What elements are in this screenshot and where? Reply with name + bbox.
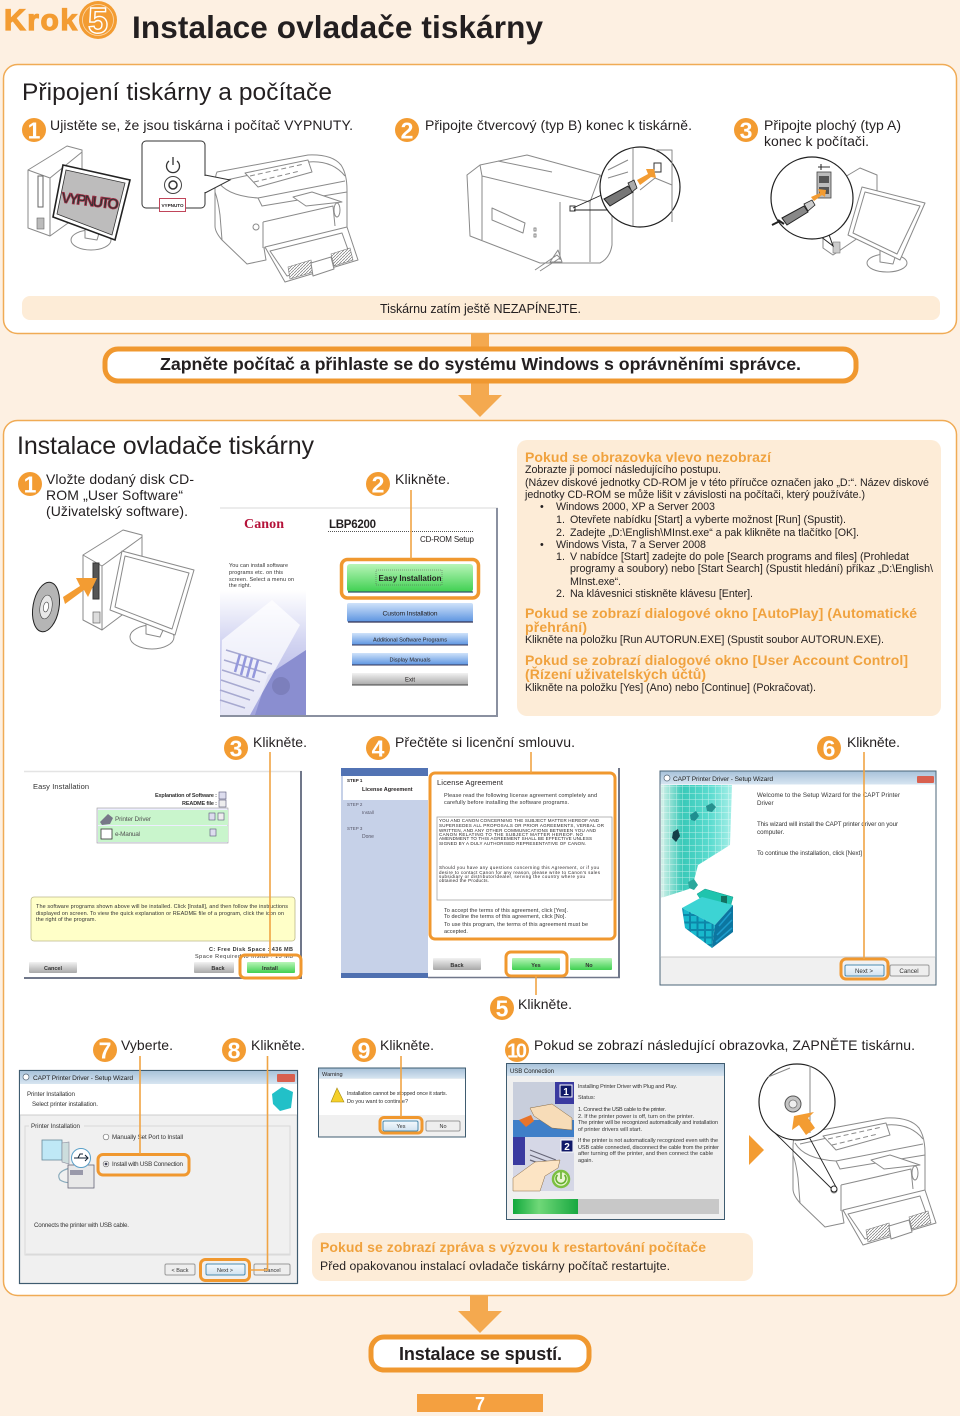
header: Krok 5 [4, 0, 117, 41]
procedure text [524, 464, 933, 600]
step 6 label: Klikněte. [847, 734, 900, 750]
screenshot: Setup Wizard welcome: Welcome to the Setup Wizard for the CAPT Printer [757, 792, 900, 799]
screenshot: USB connection: again. [578, 1158, 593, 1164]
panel: driver installation [4, 420, 956, 1296]
screenshot: License Agreement: STEP 3 [347, 826, 363, 831]
screenshot: Easy Installation: C: Free Disk Space : 436 MB [209, 947, 293, 953]
screenshot: Easy Installation: Space Required to Install : 15 MB [195, 954, 293, 960]
screenshot: warning dialog: Warning [322, 1072, 343, 1078]
screenshot: Setup Wizard welcome: This wizard will install the CAPT printer driver on your [757, 821, 898, 828]
image: connect USB cable [513, 1082, 574, 1137]
computer switched off: VYPNUTO [60, 190, 120, 214]
procedure text: • [540, 501, 544, 513]
procedure text: 2. [556, 588, 565, 600]
screenshot: printer installation wizard [20, 1070, 298, 1284]
screenshot: License Agreement: STEP 1 [347, 778, 363, 783]
screenshot: License Agreement: desire to contact Canon for any reason, please write to Canon's sales [439, 870, 601, 875]
procedure text: 1. [556, 551, 565, 563]
procedure text: Zobrazte ji pomocí následujícího postupu. [525, 464, 721, 476]
screenshot: printer installation wizard: Next > [217, 1268, 233, 1274]
screenshot: warning dialog: No [439, 1124, 447, 1130]
screenshot: License Agreement: obtained the Products. [439, 878, 489, 883]
screenshot: License Agreement: YOU AND CANON CONCERNING THE SUBJECT MATTER HEREOF AND [439, 818, 600, 823]
heading: User Account Control [525, 652, 908, 682]
button: Additional Software Programs: Additional Software Programs [373, 638, 447, 644]
screenshot: USB connection: Installing Printer Driver with Plug and Play. [578, 1084, 677, 1090]
note: restart prompt: Pokud se zobrazí zpráva s výzvou k restartování počítače [320, 1239, 706, 1255]
screenshot: License Agreement: SUPERSEDES ALL PROPOSALS OR PRIOR AGREEMENTS, VERBAL OR [439, 823, 605, 828]
step 7 label [93, 1037, 173, 1064]
panel heading: Instalace ovladače tiskárny [17, 432, 314, 460]
step 2 label [395, 117, 692, 144]
procedure text: programy a soubory) nebo [Start Search] (Spustit hledání) příkaz „D:\English\ [570, 563, 933, 575]
step 1 label: Ujistěte se, že jsou tiskárna i počítač VYPNUTY. [50, 117, 353, 133]
procedure text: 1. [556, 514, 565, 526]
screenshot: License Agreement: License Agreement [362, 787, 413, 793]
heading: User Account Control: (Řízení uživatelských účtů) [525, 665, 706, 682]
screenshot: USB connection: 1. Connect the USB cable to the printer. [578, 1107, 666, 1113]
screenshot: License Agreement: STEP 2 [347, 802, 363, 807]
screenshot: printer installation wizard: Manually Set Port to Install [112, 1134, 183, 1141]
step 3 label: konec k počítači. [764, 133, 869, 149]
screenshot: CD-ROM setup: LBP6200 [329, 519, 376, 531]
button: Display Manuals: Display Manuals [390, 658, 431, 664]
screenshot: CD-ROM setup: You can install software [229, 563, 288, 569]
screenshot: Setup Wizard welcome: Driver [757, 800, 774, 807]
step 9 label [352, 1037, 434, 1064]
step 3 label: Klikněte. [253, 734, 307, 750]
icon: computer with USB [42, 1140, 94, 1188]
screenshot: CD-ROM setup: screen. Select a menu on [229, 577, 294, 583]
screenshot: Setup Wizard welcome [660, 771, 936, 985]
screenshot: Setup Wizard welcome: CAPT Printer Driver - Setup Wizard [673, 776, 773, 783]
step 9 label: Klikněte. [380, 1037, 434, 1053]
heading: screen not shown: Pokud se obrazovka vlevo nezobrazí [525, 449, 772, 465]
step 3 label [224, 734, 307, 762]
panel heading: Připojení tiskárny a počítače [22, 79, 332, 106]
screenshot: USB connection: The printer will be recognized automatically and installation [578, 1120, 718, 1126]
step 6 label: 6 [823, 736, 835, 762]
screenshot: printer installation wizard: < Back [172, 1268, 189, 1274]
procedure text: • [540, 539, 544, 551]
screenshot: License Agreement: Install [362, 810, 374, 815]
screenshot: printer installation wizard: Connects the printer with USB cable. [34, 1222, 129, 1229]
screenshot: Setup Wizard welcome: computer. [757, 829, 784, 836]
procedure text: MInst.exe“. [570, 576, 621, 588]
screenshot: License Agreement: To accept the terms of this agreement, click [Yes]. [444, 908, 568, 914]
image: cyan blocks [661, 785, 733, 948]
procedure text: Zadejte „D:\English\MInst.exe“ a pak klikněte na tlačítko [OK]. [570, 527, 859, 539]
computer and CD [29, 530, 194, 649]
step 4 label: 4 [372, 736, 385, 762]
screenshot: License Agreement: carefully before installing the software programs. [444, 800, 569, 806]
step 1 label: 1 [28, 118, 41, 144]
button: Easy Installation (highlighted): Easy Installation [378, 574, 442, 583]
screenshot: License Agreement: subsidiary or distributor/dealer, serving the country where you [439, 874, 585, 879]
screenshot: Setup Wizard welcome: Next > [855, 968, 873, 975]
callout: power button off [142, 141, 230, 212]
note bar: do not switch on: Tiskárnu zatím ještě NEZAPÍNEJTE. [380, 301, 581, 316]
step 10 label [505, 1037, 915, 1062]
screenshot: Easy Installation: displayed on screen. To view the quick explanation or README file of a program, click the icon on [36, 911, 284, 917]
screenshot: License Agreement: Should you have any questions concerning this Agreement, or if you [439, 865, 599, 870]
image: power on: 2 [564, 1142, 570, 1153]
image: power on [513, 1137, 574, 1191]
computer switched off [28, 146, 130, 250]
screenshot: License Agreement: Done [362, 834, 374, 840]
button: Custom Installation: Custom Installation [382, 610, 438, 618]
screenshot: Setup Wizard welcome: To continue the installation, click [Next] [757, 850, 862, 857]
step 4 label: Přečtěte si licenční smlouvu. [395, 734, 575, 750]
screenshot: License Agreement: SIGNED BY A DULY AUTHORISED REPRESENTATIVE OF CANON. [439, 841, 586, 846]
procedure text: 2. [556, 527, 565, 539]
step 6 label [817, 734, 900, 762]
heading: User Account Control: Pokud se zobrazí dialogové okno [User Account Control] [525, 652, 908, 668]
step 1 label: 1 [24, 472, 37, 498]
step 3 label: Připojte plochý (typ A) [764, 117, 901, 133]
callout: log in as administrator [105, 349, 856, 381]
screenshot: warning dialog [318, 1068, 466, 1137]
button: Exit [352, 673, 468, 685]
step 1 label: Vložte dodaný disk CD- [46, 471, 194, 487]
screenshot: Easy Installation: The software programs shown above will be installed. Click [Install], and then follow the instructions [36, 904, 288, 910]
text: AutoPlay: Klikněte na položku [Run AUTORUN.EXE] (Spustit soubor AUTORUN.EXE). [525, 634, 884, 646]
screenshot: warning dialog: Installation cannot be stopped once it starts. [347, 1091, 447, 1097]
screenshot: Easy Installation: the right of the program. [36, 917, 96, 923]
button: Custom Installation [347, 603, 473, 622]
step 7 label: Vyberte. [121, 1037, 173, 1053]
screenshot: USB connection: of printer drivers will start. [578, 1127, 642, 1133]
screenshot: CD-ROM setup: the right. [229, 583, 251, 589]
procedure text: Windows Vista, 7 a Server 2008 [556, 539, 706, 551]
screenshot: Easy Installation: Easy Installation [33, 782, 89, 791]
step 3 label: 3 [740, 118, 752, 144]
page number: 7 [475, 1394, 485, 1414]
screenshot: CD-ROM setup: CD-ROM Setup [420, 535, 475, 544]
button: Exit: Exit [405, 678, 415, 684]
screenshot: USB connection: USB Connection [510, 1069, 554, 1075]
step 5 label [490, 996, 572, 1022]
screenshot: Easy Installation: e-Manual [115, 831, 141, 838]
step 10 label: Pokud se zobrazí následující obrazovka, ZAPNĚTE tiskárnu. [534, 1037, 915, 1053]
note: restart prompt [312, 1233, 753, 1281]
screenshot: USB connection: If the printer is not automatically recognized even with the [578, 1138, 718, 1144]
step 4 label [366, 734, 575, 762]
screenshot: printer installation wizard: CAPT Printer Driver - Setup Wizard [33, 1075, 133, 1082]
computer with USB port detail [771, 157, 925, 272]
screenshot: printer installation wizard: Printer Installation [27, 1091, 76, 1098]
step 10 label: 10 [507, 1040, 527, 1062]
step 2 label: 2 [372, 472, 384, 498]
screenshot: warning dialog: Do you want to continue? [347, 1099, 408, 1105]
printer rear view with USB port detail [467, 147, 680, 271]
screenshot: License Agreement: No [585, 963, 593, 969]
screenshot: License Agreement: License Agreement [437, 778, 504, 787]
step 3 label: 3 [230, 736, 242, 762]
callout: log in as administrator: Zapněte počítač a přihlaste se do systému Windows s oprávněními správce. [160, 354, 801, 374]
step 1 label [22, 117, 353, 144]
screenshot: License Agreement: To decline the terms of this agreement, click [No]. [444, 914, 566, 920]
screenshot: Setup Wizard welcome: Cancel [899, 968, 919, 975]
screenshot: USB connection: USB cable connected, disconnect the cable from the printer [578, 1145, 719, 1151]
screenshot: License Agreement: CANON RELATING TO THE SUBJECT MATTER HEREOF. NO [439, 832, 583, 837]
screenshot: Easy Installation: Back [211, 966, 226, 972]
screenshot: License Agreement: Please read the following license agreement completely and [444, 793, 597, 799]
step 9 label: 9 [358, 1038, 370, 1064]
screenshot: USB connection [506, 1064, 724, 1220]
note: restart prompt: Před opakovanou instalací ovladače tiskárny počítač restartujte. [320, 1259, 670, 1273]
panel: connect printer and computer [4, 64, 956, 334]
screenshot: printer installation wizard: Printer Installation [31, 1123, 81, 1130]
step 2 label: Připojte čtvercový (typ B) konec k tiskárně. [425, 117, 692, 133]
procedure text: V nabídce [Start] zadejte do pole [Search programs and files] (Prohledat [570, 551, 909, 563]
button: Display Manuals [352, 653, 468, 665]
step 1 label: ROM „User Software“ [46, 487, 183, 503]
screenshot: Easy Installation: Cancel [44, 966, 62, 972]
heading: AutoPlay [525, 605, 917, 635]
screenshot: printer installation wizard: Cancel [263, 1268, 281, 1274]
step 7 label: 7 [99, 1038, 111, 1064]
title: Instalace ovladače tiskárny [132, 9, 543, 45]
screenshot: CD-ROM setup: programs etc. on this [229, 570, 283, 576]
arrow: to installation start [458, 1296, 502, 1333]
header: Krok 5: Krok [4, 4, 77, 37]
callout: power button off: VYPNUTO [161, 203, 184, 208]
screenshot: License Agreement: Back [450, 963, 465, 969]
header: Krok 5: 5 [88, 0, 108, 41]
step 5 label: 5 [496, 996, 509, 1022]
page number [417, 1394, 543, 1414]
step 1 label [18, 471, 194, 519]
screenshot: Easy Installation: Explanation of Software : [155, 793, 217, 799]
screenshot: CD-ROM setup [220, 508, 498, 716]
info box: troubleshooting [517, 440, 941, 716]
screenshot: License Agreement: accepted. [444, 929, 468, 935]
printer with power button detail [759, 1064, 936, 1245]
heading: AutoPlay: přehrání) [525, 619, 587, 635]
step 1 label: (Uživatelský software). [46, 503, 188, 519]
arrow: to driver installation [458, 334, 502, 417]
step 8 label: Klikněte. [251, 1037, 305, 1053]
text: User Account Control: Klikněte na položku [Yes] (Ano) nebo [Continue] (Pokračovat). [525, 682, 816, 694]
screenshot: Easy Installation: Install [262, 966, 278, 972]
screenshot: printer installation wizard: Install with USB Connection [112, 1161, 184, 1168]
step 2 label: Klikněte. [395, 471, 450, 487]
arrow: next [749, 1135, 764, 1165]
screenshot: CD-ROM setup: Canon [244, 517, 284, 532]
screenshot: USB connection: 2. If the printer power is off, turn on the printer. [578, 1114, 694, 1120]
screenshot: License Agreement: AMENDMENT TO THIS AGREEMENT SHALL BE EFFECTIVE UNLESS [439, 836, 592, 841]
screenshot: License Agreement: WRITTEN, AND ANY OTHER COMMUNICATIONS BETWEEN YOU AND [439, 828, 597, 833]
button: Additional Software Programs [352, 633, 468, 645]
screenshot: License Agreement [341, 768, 620, 978]
step 2 label: 2 [401, 118, 413, 144]
note bar: do not switch on [22, 296, 940, 320]
screenshot: USB connection: Status: [578, 1095, 596, 1101]
step 3 label [734, 117, 901, 149]
heading: AutoPlay: Pokud se zobrazí dialogové okno [AutoPlay] (Automatické [525, 605, 917, 621]
procedure text: Windows 2000, XP a Server 2003 [556, 501, 715, 513]
step 8 label: 8 [228, 1038, 241, 1064]
procedure text: jednotky CD-ROM se může lišit v závislosti na počítači, který používáte.) [524, 489, 865, 501]
image: connect USB cable: 1 [563, 1087, 569, 1098]
screenshot: printer installation wizard: Select printer installation. [32, 1101, 98, 1108]
screenshot: License Agreement: Yes [531, 963, 541, 969]
screenshot: Easy Installation: Printer Driver [115, 816, 152, 823]
step 8 label [222, 1037, 305, 1064]
screenshot: warning dialog: Yes [397, 1124, 406, 1130]
screenshot: USB connection: after turning off the printer, and then connect the cable [578, 1151, 713, 1157]
screenshot: Easy Installation [24, 771, 302, 979]
procedure text: Na klávesnici stiskněte klávesu [Enter]. [570, 588, 753, 600]
procedure text: Otevřete nabídku [Start] a vyberte možnost [Run] (Spustit). [570, 514, 846, 526]
procedure text: (Název diskové jednotky CD-ROM je v této příručce označen jako „D:“. Název diskové [525, 477, 929, 489]
screenshot: Easy Installation: README file : [182, 801, 217, 807]
screenshot: License Agreement: To use this program, the terms of this agreement must be [444, 922, 588, 928]
callout: installation starts [371, 1337, 589, 1370]
printer in front view [215, 155, 358, 282]
button: Easy Installation (highlighted) [342, 560, 478, 598]
step 5 label: Klikněte. [518, 996, 572, 1012]
step 2 label [366, 471, 450, 498]
callout: installation starts: Instalace se spustí. [399, 1344, 562, 1364]
